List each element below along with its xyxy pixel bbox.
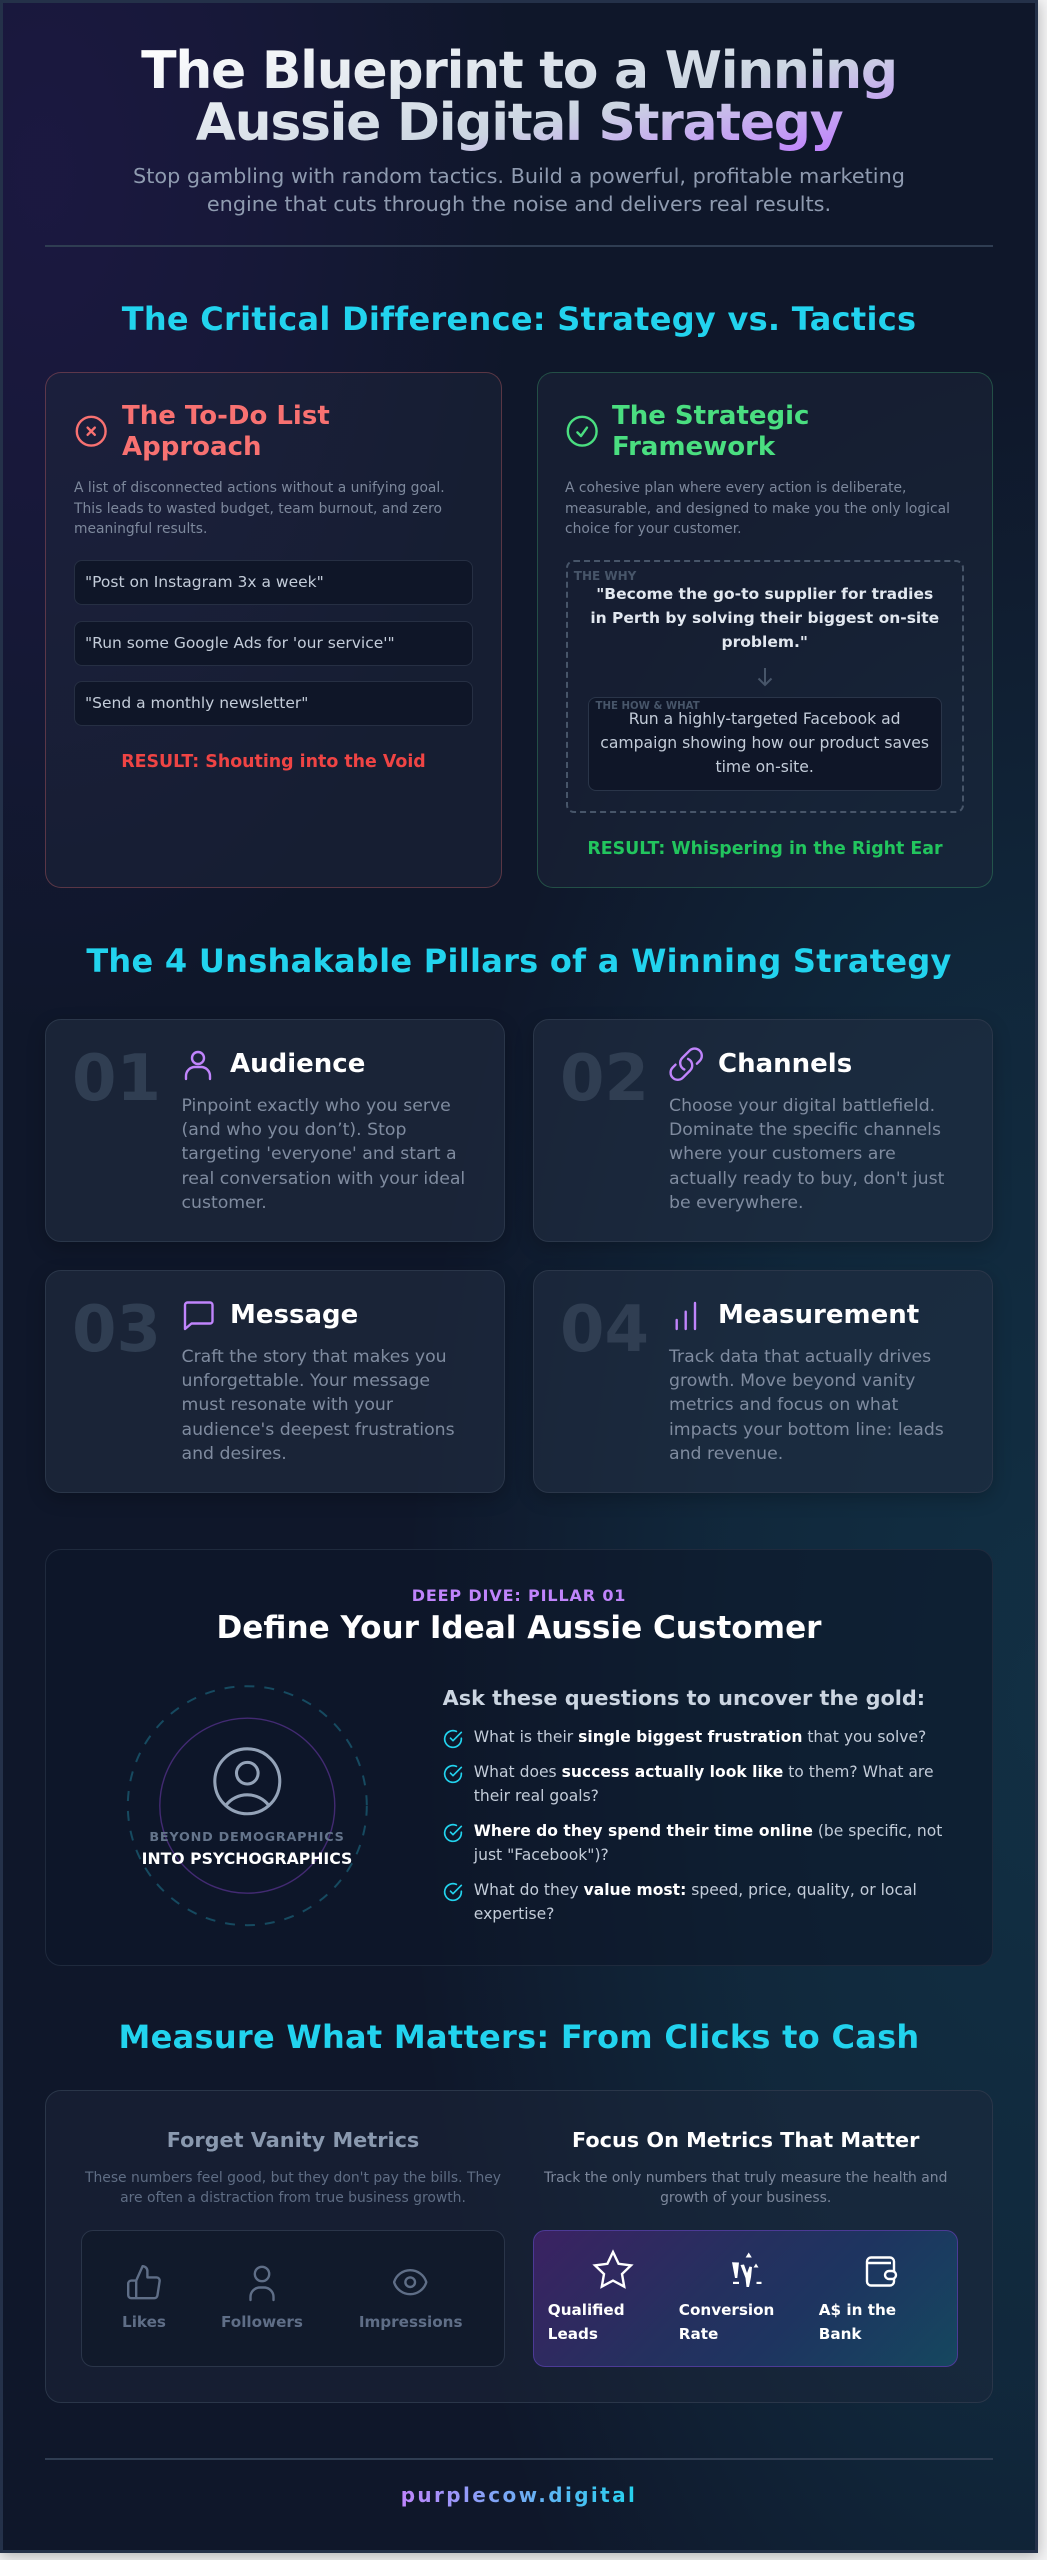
panel description: choice for your customer. [565, 521, 742, 537]
icon: check [444, 1764, 462, 1784]
icon: person [249, 2266, 275, 2302]
icon: x circle [76, 416, 107, 447]
why statement [590, 585, 939, 651]
vanity heading: Forget Vanity Metrics [167, 2128, 419, 2152]
pillar text: Track data that actually drives [669, 1347, 931, 1367]
pillar title: Message [230, 1300, 358, 1330]
framework diagram [566, 560, 964, 813]
why statement: problem." [722, 633, 808, 651]
panel: pillar 03 message [45, 1270, 505, 1493]
pillar text: unforgettable. Your message [182, 1371, 430, 1391]
vanity description [85, 2170, 501, 2206]
subtitle: Stop gambling with random tactics. Build a powerful, profitable marketing [133, 164, 905, 188]
icon: star [589, 2246, 637, 2294]
how statement [600, 710, 929, 776]
tactic item 2 [74, 621, 473, 666]
heading: pillars: The 4 Unshakable Pillars of a Winning Strategy [86, 942, 952, 980]
metric: conversion rate: Rate [679, 2325, 718, 2343]
panel heading [612, 401, 809, 462]
title [141, 44, 897, 162]
question text: just "Facebook")? [474, 1846, 609, 1864]
panel: strategic framework [537, 372, 993, 888]
deep dive heading: Define Your Ideal Aussie Customer [216, 1610, 822, 1646]
title: Aussie Digital Strategy [196, 92, 842, 152]
pillar text: where your customers are [669, 1144, 896, 1164]
metric: impressions [359, 2269, 463, 2331]
vanity metrics box [81, 2230, 505, 2367]
vanity description: These numbers feel good, but they don't pay the bills. They [85, 2170, 501, 2186]
panel heading [122, 401, 330, 462]
question text [474, 1880, 917, 1923]
panel description: This leads to wasted budget, team burnout, and zero [74, 501, 442, 517]
pillar text: customer. [182, 1193, 267, 1213]
icon: eye [393, 2269, 428, 2296]
icon: thumbs up [127, 2265, 161, 2300]
question text [473, 1822, 942, 1864]
tactic item 3 [74, 681, 473, 726]
label: beyond demographics: BEYOND DEMOGRAPHICS [149, 1830, 345, 1845]
metric: qualified leads: Qualified [548, 2301, 625, 2319]
number: 04 [560, 1293, 649, 1367]
label: Impressions [359, 2313, 463, 2331]
tactic item 2: "Run some Google Ads for 'our service'" [85, 634, 395, 652]
focus heading: Focus On Metrics That Matter [572, 2128, 919, 2152]
question 4 [444, 1880, 917, 1923]
panel heading: The To-Do List [122, 401, 330, 431]
question text: What does success actually look like to them? What are [474, 1762, 934, 1780]
how statement: time on-site. [715, 758, 814, 776]
panel heading: Approach [122, 432, 262, 462]
pillar text: Choose your digital battlefield. [669, 1096, 935, 1116]
panel: pillar 01 audience [45, 1019, 505, 1242]
tactic item 1 [74, 560, 473, 605]
panel description: measurable, and designed to make you the only logical [565, 501, 950, 517]
panel heading: Framework [612, 432, 775, 462]
icon: check circle [566, 416, 598, 447]
number: 03 [72, 1293, 161, 1367]
result label: RESULT: Shouting into the Void [121, 752, 426, 772]
rings [126, 1685, 368, 1926]
panel: metrics comparison [45, 2090, 993, 2403]
pillar text: must resonate with your [182, 1395, 393, 1415]
question text: What is their single biggest frustration that you solve? [474, 1728, 926, 1746]
pillar text: audience's deepest frustrations [182, 1420, 455, 1440]
subtitle [133, 164, 905, 216]
pillar text: growth. Move beyond vanity [669, 1371, 915, 1391]
pillar text: actually ready to buy, don't just [669, 1169, 944, 1189]
label: the why: THE WHY [574, 569, 636, 583]
focus description: growth of your business. [660, 2190, 831, 2206]
metric: money in bank: Bank [819, 2325, 862, 2343]
pillar title: Audience [230, 1049, 365, 1079]
pillar text: Pinpoint exactly who you serve [182, 1096, 451, 1116]
question text: expertise? [474, 1905, 554, 1923]
panel description [565, 480, 950, 537]
vanity description: are often a distraction from true business growth. [120, 2190, 466, 2206]
result label: RESULT: Whispering in the Right Ear [587, 838, 943, 858]
metric: likes [122, 2265, 166, 2331]
question text [474, 1762, 934, 1805]
question 1 [444, 1728, 926, 1748]
icon: check [444, 1730, 462, 1748]
icon: chat bubble [184, 1301, 214, 1330]
arrow: down [758, 668, 772, 686]
metric: qualified leads [548, 2298, 625, 2346]
how and what box [588, 697, 942, 791]
panel: deep dive [45, 1549, 993, 1966]
question text: What do they value most: speed, price, quality, or local [474, 1880, 917, 1898]
question text: their real goals? [474, 1787, 599, 1805]
diagram: demographics to psychographics [126, 1685, 368, 1926]
footer brand: purplecow.digital [401, 2483, 637, 2507]
pillar text: impacts your bottom line: leads [669, 1420, 944, 1440]
question 3 [444, 1822, 942, 1864]
pillar text: metrics and focus on what [669, 1395, 898, 1415]
icon: check [444, 1882, 462, 1902]
panel heading: The Strategic [612, 401, 809, 431]
eyebrow: DEEP DIVE: PILLAR 01 [412, 1586, 626, 1604]
metric: followers [221, 2266, 303, 2331]
label: Followers [221, 2313, 303, 2331]
key metrics box [533, 2230, 958, 2367]
icon: check [444, 1824, 462, 1842]
pillar text [182, 1347, 455, 1464]
pillar text [668, 1347, 944, 1464]
panel: to-do list approach [45, 372, 502, 888]
pillar text: targeting 'everyone' and start a [182, 1144, 457, 1164]
panel: pillar 02 channels [533, 1019, 993, 1242]
metric: qualified leads: Leads [548, 2325, 598, 2343]
pillar title: Measurement [718, 1300, 919, 1330]
question 2 [444, 1762, 934, 1805]
icon: wallet [860, 2250, 904, 2294]
pillar text: Dominate the specific channels [669, 1120, 941, 1140]
questions heading: Ask these questions to uncover the gold: [443, 1686, 925, 1710]
metric: conversion rate [679, 2298, 774, 2346]
label: the how and what: THE HOW & WHAT [596, 701, 700, 712]
why statement: "Become the go-to supplier for tradies [596, 585, 933, 603]
tactic item 1: "Post on Instagram 3x a week" [85, 573, 324, 591]
pillar text [182, 1096, 465, 1213]
tactic item 3: "Send a monthly newsletter" [85, 694, 308, 712]
panel description [74, 480, 445, 537]
pillar text: and desires. [182, 1444, 287, 1464]
icon: conversion rate [722, 2245, 782, 2295]
focus description: Track the only numbers that truly measure the health and [544, 2170, 947, 2186]
why statement: in Perth by solving their biggest on-site [590, 609, 939, 627]
subtitle: engine that cuts through the noise and delivers real results. [207, 192, 831, 216]
pillar text [669, 1096, 944, 1213]
number: 02 [560, 1042, 649, 1116]
title: The Blueprint to a Winning [141, 40, 897, 100]
metric: money in bank: A$ in the [819, 2301, 896, 2319]
icon: person [184, 1050, 212, 1080]
icon: user circle [213, 1747, 282, 1816]
icon: bar chart [676, 1302, 696, 1330]
heading: measure what matters: Measure What Matters: From Clicks to Cash [119, 2018, 919, 2056]
question text: Where do they spend their time online (be specific, not [474, 1822, 942, 1840]
panel: pillar 04 measurement [533, 1270, 993, 1493]
label: Likes [122, 2313, 166, 2331]
how statement: Run a highly-targeted Facebook ad [629, 710, 901, 728]
icon: link [669, 1047, 703, 1081]
metric: conversion rate: Conversion [679, 2301, 774, 2319]
metric: money in bank [819, 2298, 896, 2346]
number: 01 [72, 1042, 161, 1116]
panel description: meaningful results. [74, 521, 207, 537]
label: into psychographics: INTO PSYCHOGRAPHICS [142, 1849, 352, 1868]
panel description: A cohesive plan where every action is deliberate, [565, 480, 906, 496]
focus description [496, 2168, 996, 2209]
pillar text: Craft the story that makes you [182, 1347, 447, 1367]
pillar text: (and who you don’t). Stop [182, 1120, 406, 1140]
panel description: A list of disconnected actions without a unifying goal. [74, 480, 445, 496]
pillar title: Channels [718, 1049, 852, 1079]
pillar text: real conversation with your ideal [182, 1169, 465, 1189]
heading: strategy vs tactics: The Critical Difference: Strategy vs. Tactics [122, 300, 916, 338]
pillar text: be everywhere. [669, 1193, 804, 1213]
pillar text: and revenue. [669, 1444, 783, 1464]
how statement: campaign showing how our product saves [600, 734, 929, 752]
